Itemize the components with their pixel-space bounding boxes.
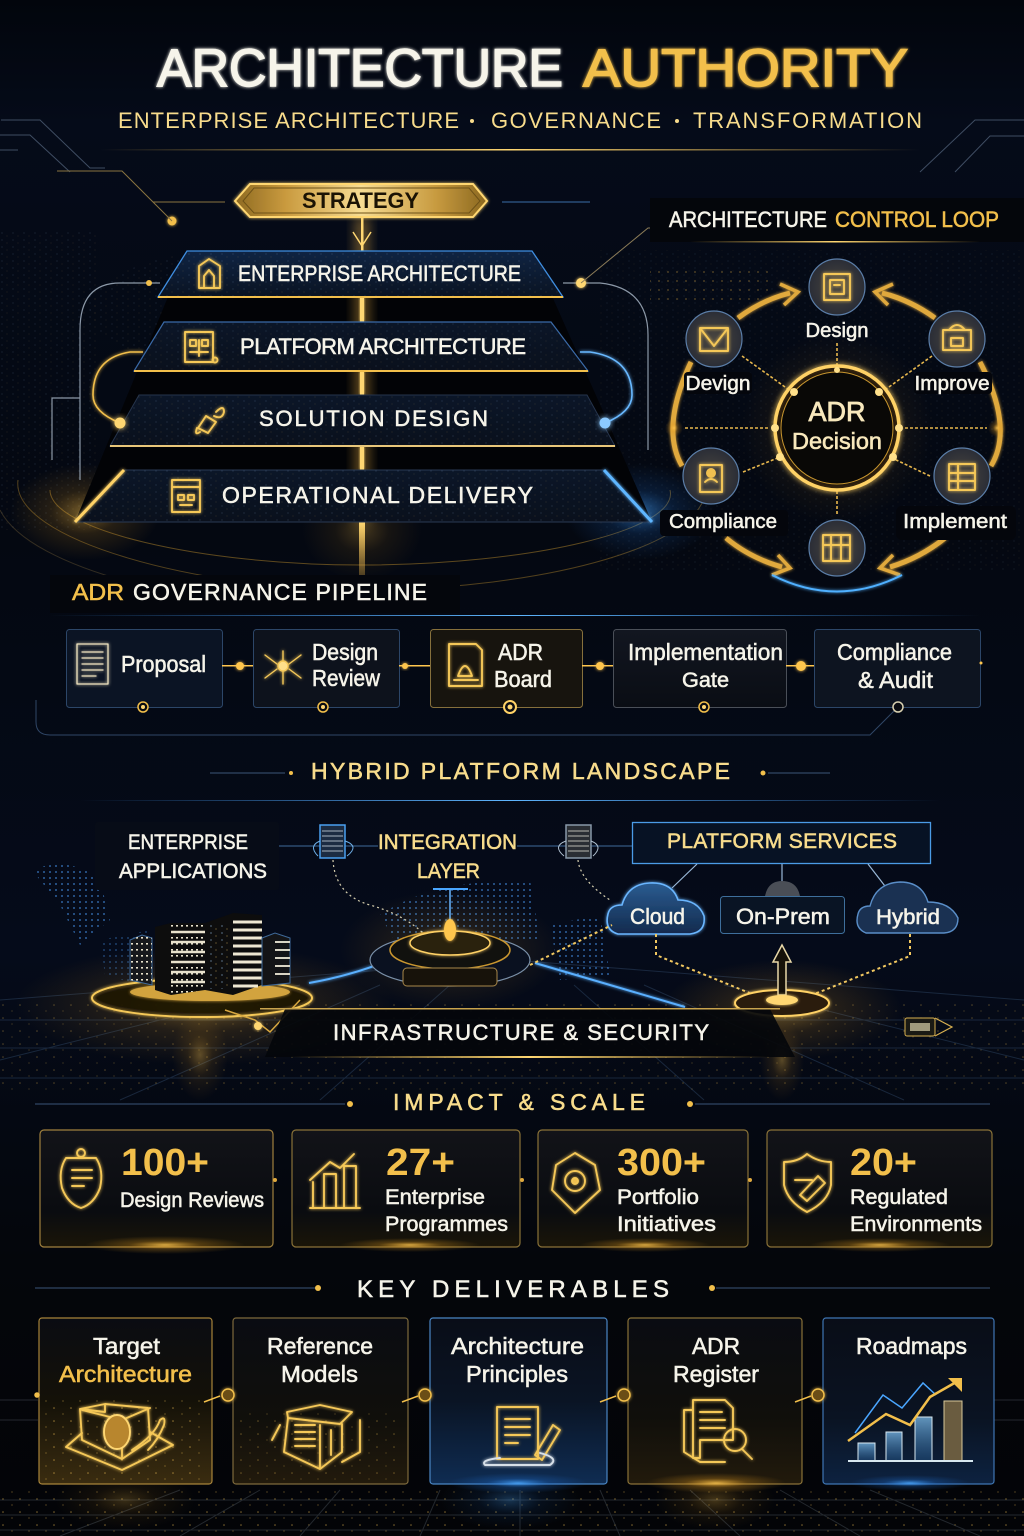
node: design: Design (806, 320, 868, 342)
platform floor glows (15, 945, 395, 1065)
stat: enterprise programmes: 27+ (386, 1142, 455, 1184)
stat: enterprise programmes: Programmes (385, 1213, 508, 1236)
box: enterprise applications: APPLICATIONS (119, 860, 267, 883)
icon: bar house (310, 1154, 360, 1208)
card: adr register: ADR (692, 1333, 740, 1359)
node: implement (896, 448, 1016, 540)
stat: portfolio initiatives: Initiatives (617, 1213, 716, 1236)
icon: solution link (196, 408, 224, 433)
step: compliance and audit (814, 630, 980, 712)
title (157, 39, 908, 98)
heading: pipeline: GOVERNANCE PIPELINE (133, 579, 427, 605)
step: adr board (430, 630, 582, 713)
step: adr board: ADR (498, 639, 543, 665)
panel: impact and scale (35, 1089, 992, 1254)
step: compliance and audit: & Audit (858, 667, 934, 693)
icon: operational clipboard (172, 480, 200, 512)
subtitle: GOVERNANCE (491, 108, 661, 133)
card: target architecture (39, 1318, 212, 1484)
icon: beacon (735, 945, 829, 1016)
icon: adr document (449, 644, 482, 686)
side loop: right upper (563, 283, 648, 450)
badge: strategy (235, 184, 487, 217)
step: proposal: Proposal (121, 651, 206, 677)
panel: hybrid platform landscape (15, 758, 958, 1100)
icon: connector plug (905, 1018, 952, 1036)
box: on-prem: On-Prem (736, 904, 830, 929)
step: adr board: Board (494, 666, 552, 692)
stat: enterprise programmes (292, 1130, 520, 1252)
layer: operational delivery: OPERATIONAL DELIVERY (222, 482, 533, 508)
step: implementation gate (614, 630, 786, 712)
step: design review (254, 630, 400, 712)
side loop: left gold (93, 352, 143, 423)
icon: cube (66, 1404, 173, 1470)
step: implementation gate: Gate (682, 669, 729, 692)
bar chart: roadmap (848, 1378, 973, 1461)
box: on-prem (720, 881, 844, 934)
icon: document and pen (484, 1407, 560, 1465)
node: compliance: Compliance (669, 511, 777, 533)
heading: control loop: CONTROL LOOP (835, 207, 999, 232)
node: implement: Implement (903, 511, 1007, 533)
icon: integration hub (309, 889, 685, 1007)
node: devign: Devign (686, 373, 750, 395)
stat: regulated environments: Environments (850, 1213, 982, 1236)
node: improve (914, 311, 992, 395)
label: integration layer: INTEGRATION (378, 831, 517, 854)
band: infrastructure and security (260, 1008, 795, 1058)
icon: server right (517, 825, 632, 858)
card: architecture principles: Architecture (451, 1333, 584, 1359)
spokes (685, 343, 987, 516)
stat: design reviews (40, 1130, 273, 1254)
side loop: right blue (580, 352, 632, 423)
layer: solution design (110, 395, 615, 446)
stat: portfolio initiatives: Portfolio (617, 1186, 699, 1209)
heading: control loop (669, 207, 999, 232)
heading: hybrid: HYBRID PLATFORM LANDSCAPE (311, 758, 730, 784)
card: reference models: Models (281, 1361, 358, 1387)
panel: key deliverables (35, 1276, 994, 1493)
hub: adr decision: Decision (792, 428, 882, 454)
layer: enterprise architecture (158, 251, 563, 297)
box: platform services: PLATFORM SERVICES (667, 830, 897, 853)
stat: design reviews: Design Reviews (120, 1189, 264, 1212)
layer: operational delivery (75, 470, 652, 522)
panel: adr governance pipeline (36, 575, 982, 735)
subtitle: ENTERPRISE ARCHITECTURE (118, 108, 459, 133)
step: implementation gate: Implementation (628, 639, 783, 665)
card: roadmaps: Roadmaps (856, 1333, 967, 1359)
world map dots (32, 864, 610, 985)
icon: design node (265, 651, 301, 684)
dotted links (333, 860, 610, 935)
step: proposal (66, 630, 222, 712)
side loop: left upper (52, 283, 160, 480)
layer: solution design: SOLUTION DESIGN (259, 406, 488, 431)
connectors (222, 661, 982, 671)
title: ARCHITECTURE (157, 39, 563, 98)
heading: pipeline: ADR (72, 579, 124, 605)
icon: enterprise building (199, 259, 220, 288)
panel: architecture control loop (650, 198, 1024, 592)
card: target architecture: Architecture (59, 1361, 192, 1387)
subtitle (118, 108, 922, 133)
node: design (806, 259, 868, 342)
cloud: hybrid (857, 882, 958, 933)
card: architecture principles (430, 1318, 607, 1493)
stat: portfolio initiatives: 300+ (617, 1142, 706, 1184)
hub: adr decision: ADR (808, 396, 866, 427)
card: reference models (233, 1318, 408, 1484)
badge: strategy: STRATEGY (302, 188, 419, 213)
icon: server left (279, 825, 378, 858)
icon: document (77, 644, 108, 684)
step: design review: Review (312, 665, 380, 691)
cloud: hybrid: Hybrid (876, 906, 940, 929)
stat: portfolio initiatives (538, 1130, 748, 1252)
icon: register and magnifier (684, 1400, 752, 1462)
stat: regulated environments: 20+ (850, 1142, 917, 1184)
card: target architecture: Target (93, 1333, 161, 1359)
heading: deliverables: KEY DELIVERABLES (357, 1276, 669, 1303)
icon: buildings (92, 913, 312, 1032)
box: platform services (632, 822, 930, 890)
card: reference models: Reference (267, 1333, 373, 1359)
node: compliance (660, 448, 788, 536)
panel: strategy pyramid (0, 171, 715, 612)
box: enterprise applications (95, 822, 279, 890)
stat: regulated environments (767, 1130, 992, 1252)
cloud: cloud (607, 883, 704, 934)
layer: platform architecture (134, 322, 588, 371)
icon: gear shield (552, 1153, 600, 1213)
icon: platform blueprint (185, 332, 218, 362)
heading: impact: IMPACT & SCALE (393, 1089, 645, 1115)
hub: adr decision (742, 333, 932, 523)
card: adr register: Register (673, 1361, 759, 1387)
connectors: deliverables (35, 1389, 824, 1402)
box: enterprise applications: ENTERPRISE (128, 831, 248, 854)
layer: platform architecture: PLATFORM ARCHITECTURE (240, 334, 526, 359)
step: design review: Design (312, 639, 378, 665)
heading: control loop: ARCHITECTURE (669, 207, 827, 232)
label: integration layer: LAYER (417, 860, 480, 883)
subtitle: TRANSFORMATION (693, 108, 922, 133)
stat: design reviews: 100+ (121, 1142, 209, 1184)
node: devign (684, 311, 752, 395)
band: infrastructure and security: INFRASTRUCTURE & SECURITY (333, 1020, 709, 1045)
layer: enterprise architecture: ENTERPRISE ARCHITECTURE (238, 261, 521, 286)
node: improve: Improve (914, 373, 990, 395)
stat: enterprise programmes: Enterprise (385, 1186, 485, 1209)
node: deploy (809, 520, 865, 576)
title: AUTHORITY (583, 39, 908, 98)
card: roadmaps (823, 1318, 994, 1491)
stat: regulated environments: Regulated (850, 1186, 948, 1209)
label: integration layer (378, 831, 517, 883)
arrows: outer ring (673, 284, 1000, 575)
icon: review badge (61, 1149, 101, 1208)
card: adr register (628, 1318, 802, 1493)
icon: regulated shield (784, 1154, 831, 1212)
gold dotted links (530, 925, 910, 995)
icon: model box (272, 1405, 360, 1469)
step: compliance and audit: Compliance (837, 639, 952, 665)
cloud: cloud: Cloud (630, 904, 685, 929)
card: architecture principles: Principles (466, 1361, 568, 1387)
